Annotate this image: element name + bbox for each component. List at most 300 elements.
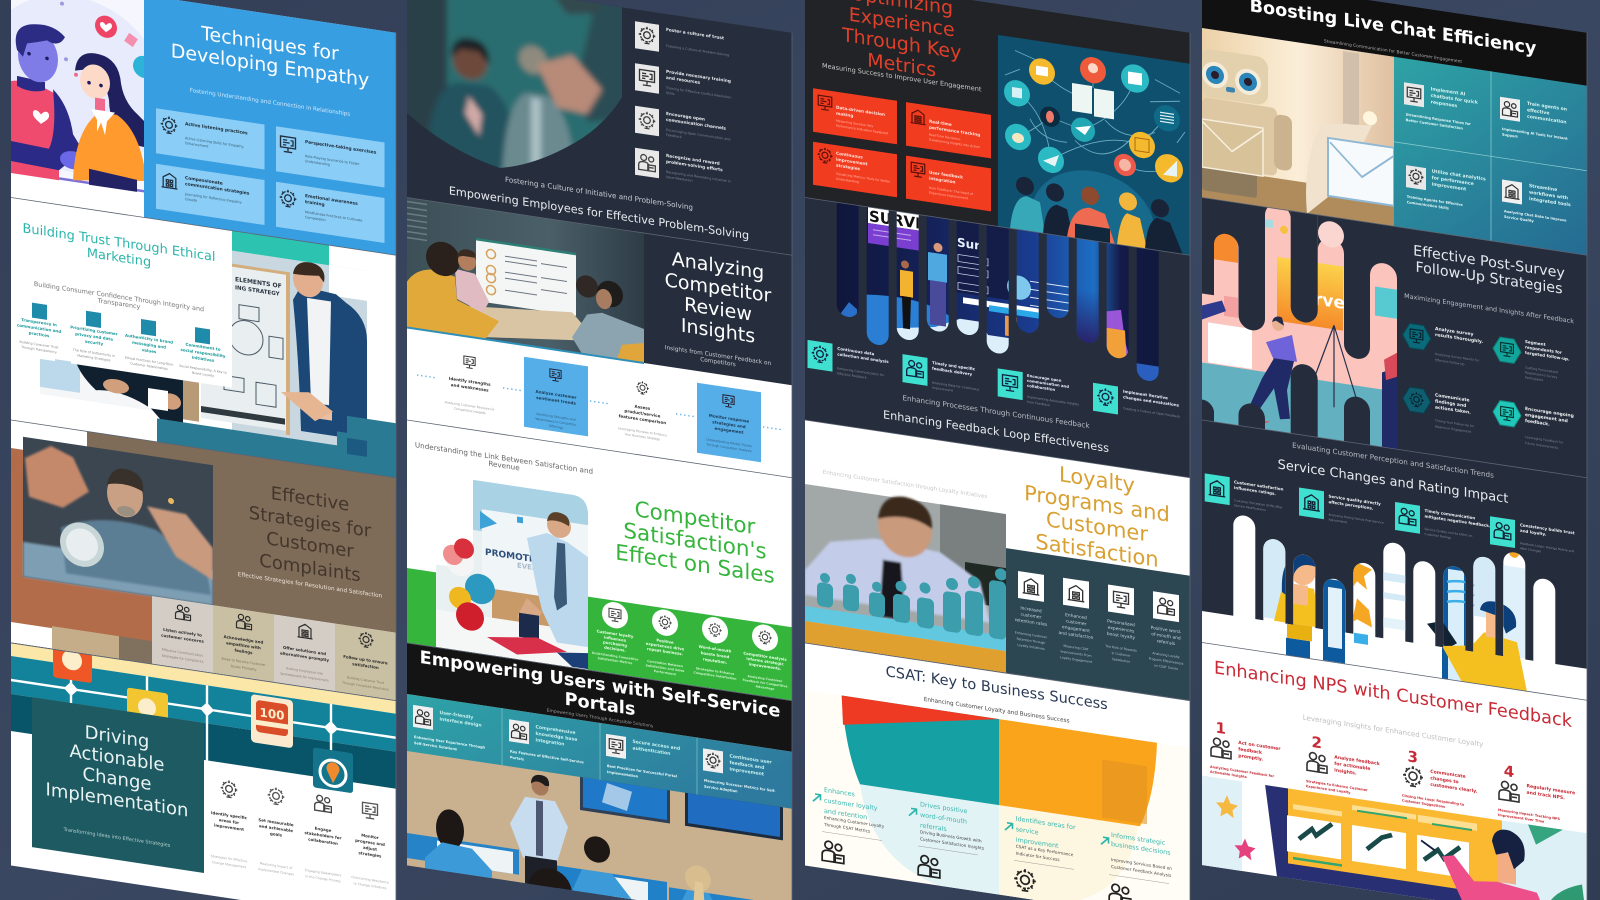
item: positive experiences [646,607,685,678]
card: active listening [156,108,264,170]
item: loyalty: influences [604,635,627,643]
step 3: customers clearly. [1430,782,1478,795]
item: continuous data: Enhancing Communication for [837,366,885,377]
item: workflows: Analyzing Chat Data to Improve [1504,209,1567,223]
item: continuous feedback: Continuous user [730,753,772,766]
decorative quote marks [12,199,76,254]
item: word of mouth: on CSAT Scores [1154,663,1178,671]
item: encourage: Future Improvements [1525,441,1559,450]
card: emotional awareness: Compassion [305,215,326,222]
title: Change [83,764,151,795]
item: workflows: Service Quality [1504,215,1534,223]
subtitle: Measuring Success to Improve User Engagement [822,62,982,94]
card: user feedback: integration [929,176,955,185]
step 3: Customer Suggestions [1402,799,1445,809]
item: referrals [909,799,984,885]
item: personalized: Personalized [1107,618,1135,628]
item: communication: Feedback [666,133,682,139]
item: encourage: engagement and [1525,412,1568,424]
illustration: survey through vertical pill slots [825,200,1170,392]
card: data-driven: making [836,111,853,118]
panel: teal tips [1394,57,1587,256]
item: monitor: Monitor [361,833,379,840]
title: Actionable [70,741,164,776]
item: communication: Customer Ratings [1424,532,1452,540]
item: loyalty: customer loyalty [824,796,878,812]
card: perspective-taking: Understanding [305,159,330,167]
title: Techniques for [200,21,339,65]
item: segment: Crafting Personalized [1525,365,1558,374]
step 2 [1306,732,1381,799]
item: training: Provide necessary training [666,69,731,85]
item: privacy: Marketing Strategies [77,353,111,362]
photo: man with clock [23,437,213,605]
item: privacy: Prioritizing customer [70,324,118,337]
title: Enhancing Feedback Loop Effectiveness [883,407,1109,455]
card: compassionate communication: Compassionate [185,175,223,187]
item: open communication: from Feedback [1027,400,1050,407]
item: training: Skills [666,91,675,96]
item: secure access: Secure access and [632,739,680,752]
item: word of mouth: referrals [1157,638,1176,647]
item: retention: Retention Through [1017,637,1045,645]
slide: CSAT Key to Business Success [805,643,1190,900]
item: retention [1015,570,1048,651]
item: satisfaction: Service Modifications [1234,503,1266,512]
item: positive experiences: Positive [656,637,674,645]
card: emotional awareness [276,182,384,243]
item: communicate [1403,386,1475,434]
item: personalized: boost loyalty [1107,631,1136,641]
item: engagement: engagement [1062,624,1090,634]
slide: Effective Strategies for Customer Complaints [11,420,396,701]
item: timely feedback [902,354,979,397]
slide: Competitor Satisfaction's Effect on Sales [407,420,792,701]
step 3: Closing the Loop: Responding to [1402,794,1465,807]
item: satisfaction [1205,473,1284,515]
item: authenticity: Ethical Practices for Long-Term [125,356,173,367]
item: train agents: Train agents on [1527,101,1567,113]
item: communication [1395,502,1491,546]
item: consistency: Consistency builds trust [1520,522,1575,535]
item: identify: Strategies for Effective [211,854,247,863]
item: timely feedback: Analyzing Data for Continuous [932,381,979,392]
item: consistency [1490,516,1575,558]
photo: promotional display [436,474,588,670]
item: responsibility: initiatives [192,355,215,363]
item: response card: strategies and [712,419,746,429]
item: sentiment card: Weaknesses in Competitor [535,417,577,427]
step 2: Experience and Loyalty [1306,784,1351,795]
item: engagement: and satisfaction [1059,630,1094,641]
item: segment: respondents for [1525,344,1563,355]
item: stakeholders: stakeholders for [305,830,341,841]
item: stakeholders [305,793,342,884]
step 1: promptly. [1238,753,1263,763]
item: secure access [606,734,680,785]
slide: Effective Post-Survey Follow-Up Strategies [1202,192,1587,478]
item: monitor: to Change Initiatives [354,881,387,890]
item: iterative changes: Implement iterative [1123,389,1168,400]
title: Competitor [635,497,755,540]
item: AI chatbots [1404,82,1479,133]
item: analyze survey [1403,321,1483,369]
card: continuous improvement: Visualizing Metrics: Tools for Better [836,172,891,184]
item: responsibility: social responsibility [180,347,226,359]
item: measure: Measuring Impact of [260,861,293,870]
title: Effective [271,483,349,516]
photo: blurred team pointing [407,0,622,168]
item: word of mouth: Program Effectiveness [1149,657,1184,666]
title: Empowering Users with Self-Service [420,647,780,722]
item: training: Training for Effective Conflict Resolution [665,86,731,100]
card: data-driven: Performance Indicators Explained [836,124,888,135]
item: continuous feedback: Service Adoption [704,785,738,794]
slide: Building Trust Through Ethical Marketing [11,198,396,478]
title: Portals [565,689,635,720]
item: communication [635,106,730,140]
step 4 [1498,761,1575,828]
item: service improvement: improvement [1016,836,1059,850]
step 2: insights. [1334,767,1357,777]
slide: Enhancing Feedback Loop Effectiveness [805,198,1190,478]
photo: presenter at whiteboard: ELEMENTS OF [235,276,282,290]
item: monitor: Overcoming Resistance [351,875,389,885]
title: Building Trust Through Ethical [23,221,215,265]
title: Effective Post-Survey [1413,243,1565,282]
item: word of mouth: Positive word- [1151,625,1182,635]
illustration: rating dashboard and presenter [1202,762,1587,900]
item: listen actively: Strategies for Complaints [162,654,204,664]
item: competitor analysis: improvements. [749,661,782,671]
item: consistency: After Changes [1520,546,1542,553]
slide: Driving Actionable Change Implementation [11,635,396,900]
card: perspective-taking: Perspective-taking exercises [305,139,377,156]
title: Experience [849,3,955,41]
item: timely feedback: Improvement [932,386,954,393]
step 4: and track NPS. [1526,790,1565,801]
title: Complaints [259,550,361,586]
item: continuous feedback: improvement [730,766,765,778]
card: compassionate communication [156,164,264,225]
photo: promotional display: PROMOTI [485,548,532,565]
step 1: 1 [1215,719,1226,738]
item: transparency: Building Consumer Trust [20,340,59,350]
item: loyalty: Enhancing Customer Loyalty [824,815,885,829]
item: acknowledge: feelings [235,648,253,655]
item: strengths: Identify strengths [449,376,491,387]
subtitle: Transparency [97,296,140,311]
item: stakeholders: Engage [315,826,332,833]
item: communication: Timely communication [1424,508,1475,521]
item: listen actively [152,596,213,673]
slide: Enhancing NPS with Customer Feedback [1202,642,1587,900]
item: open communication: communication and [1027,378,1069,389]
card: user feedback: User Feedback: The Heart of [929,186,974,196]
subtitle: Leveraging Insights for Enhanced Customer Loyalty [1303,713,1483,749]
item: interface design: User-friendly [440,710,473,721]
illustration: survey through vertical pill slots: Sur [957,235,980,253]
item: engagement: Loyalty Engagement [1060,655,1093,664]
item: response card [697,383,761,462]
item: strengths [445,353,495,417]
item: continuous data: collection and analysis [837,351,889,364]
title: Marketing [87,246,151,270]
item: strategic decisions: Informs strategic [1111,831,1166,847]
item: measure: Set measurable [258,817,294,827]
item: listen actively: Effective Communication [162,648,203,658]
item: referrals: Driving Business Growth with [920,829,982,844]
panel: blue content [144,0,396,255]
item: authenticity: values [142,347,157,354]
item: quality: Service quality directly [1328,493,1381,506]
item: retention: Increased [1020,605,1042,615]
item: competitor analysis: Competitor analysis [743,650,787,662]
item: encourage: Leveraging Feedback for [1525,435,1564,445]
item: foster trust: Foster a culture of trust [666,27,724,42]
subtitle: Fostering Understanding and Connection in Relationships [190,88,350,118]
item: knowledge base: Comprehensive [536,724,575,736]
item: chat analytics: improvement [1432,181,1467,193]
subtitle: Maximizing Engagement and Insights After Feedback [1404,292,1574,325]
title: Effect on Sales [615,540,775,589]
step 2: for actionable [1334,761,1370,772]
card: continuous improvement: improvement [836,157,868,166]
item: authenticity: messaging and [132,340,166,350]
item: interface design: interface design [440,716,482,729]
step 4: Improvement Over Time [1498,813,1545,824]
item: identify: improvement [214,822,244,832]
card: continuous improvement [813,142,897,197]
column 1 of slides [0,0,396,900]
item: knowledge base [509,719,584,771]
item: quality: Analyzing Rating Trends Post-Service [1328,512,1384,525]
title: Review [684,293,752,326]
item: continuous data: Effective Feedback [837,371,867,380]
item: encourage: feedback. [1525,418,1550,428]
photo: man arranging figures [805,482,1007,673]
item: features: features comparison [619,413,666,425]
item: competitor analysis: Advantage [756,684,774,691]
item: follow up: Follow up to ensure [343,654,388,666]
item: chat analytics: Training Agents for Effective [1407,195,1463,207]
item: listen actively: Listen actively to [163,627,202,638]
item: word of mouth: Competitive Satisfaction [693,670,737,681]
item: service improvement: Identifies areas for [1016,815,1076,832]
item: loyalty: Satisfaction Metrics [598,656,633,665]
item: retention: customer [1021,612,1042,621]
slide: Service Changes and Rating Impact [1202,420,1587,702]
item: monitor: progress and [355,838,385,847]
title: Service Changes and Rating Impact [1278,457,1508,507]
item: loyalty: Understanding Competitor [592,651,639,662]
item: offer solutions: alternatives promptly [280,650,329,663]
item: authenticity [125,317,173,372]
card: data-driven: Measuring Success: Key [836,119,873,128]
item: responsibility [179,325,227,380]
step 4: Measuring Impact: Tracking NPS [1498,808,1561,821]
item: strategic decisions: Customer Feedback Analysis [1111,864,1171,878]
item: communicate: Timing Your Follow-Up for [1434,418,1475,428]
slide: Optimizing Experience Through Key Metrics [805,0,1190,290]
step 1: feedback [1238,746,1263,756]
item: retention: Enhancing Customer [1015,630,1048,639]
item: responsibility: Social Responsibility: A Key to [179,364,227,375]
panel: benefits [1006,548,1190,701]
item: satisfaction: influences ratings. [1234,485,1276,496]
card: continuous improvement: strategies [836,163,861,171]
item: positive experiences: experiences drive [646,641,685,652]
illustration: survey through vertical pill slots: SURVE [869,207,925,234]
item: follow up [335,624,396,701]
item: timely feedback: feedback delivery [932,366,973,377]
item: responsibility: Commitment to [186,342,221,352]
card: real-time: Real-Time Decisions: [929,133,961,141]
item: measure: and achievable [259,823,293,833]
map bands with route lines and tiles [11,635,396,800]
subtitle: Building Consumer Confidence Through Integrity and [34,280,204,313]
subtitle: Evaluating Customer Perception and Satisfaction Trends [1292,441,1494,480]
panel: white header and steps [1202,642,1587,833]
item: recognize [635,148,730,182]
card: perspective-taking [276,126,384,188]
item: consistency: and loyalty. [1520,528,1547,537]
step 1 [1210,718,1281,784]
item: acknowledge: Steps to Resolve Customer [221,657,266,667]
item: loyalty [813,784,885,870]
item: identify: Identify specific [211,810,248,820]
item: features: Assess [635,404,651,411]
item: stakeholders: in the Change Process [305,874,341,884]
tile: 100 [251,694,293,748]
slide: Loyalty Programs and Customer Satisfaction [805,420,1190,701]
item: transparency: Through Transparency [20,345,57,354]
item: iterative changes [1093,383,1180,424]
title: CSAT: Key to Business Success [886,663,1108,713]
item: loyalty: Through CSAT Metrics [823,822,870,834]
item: recognize: Issue Resolution [666,175,693,183]
item: identify: areas for [219,817,239,825]
card: user feedback: Experience Improvement [929,191,969,201]
step 2: Analyze feedback [1334,754,1381,767]
step 4: 4 [1504,762,1514,781]
item: positive experiences: Satisfaction and Sales [646,663,685,673]
item: train agents: communication [1527,114,1567,126]
item: transparency: communication and [17,322,61,334]
item: iterative changes: Creating a Culture of Open Feedback [1123,406,1180,419]
item: segment: targeted follow-up. [1525,350,1570,362]
item: train agents [1500,97,1568,146]
photo: presenter at whiteboard [40,231,367,446]
item: knowledge base: Key Features of Effective Self-Service [510,749,584,765]
item: continuous feedback [703,748,776,799]
item: stakeholders: Engaging Stakeholders [305,868,342,878]
item: engagement: Enhanced [1065,612,1087,621]
item: loyalty: Enhances [824,786,856,799]
item: iterative changes: changes and evaluations [1123,394,1180,408]
item: communication: Encourage open [666,111,705,123]
item: recognize: Recognize and reward [666,153,720,167]
item: features: Your Business Strategy [625,432,660,441]
item: secure access: authentication [632,745,670,757]
item: positive experiences: repeat business. [647,646,684,656]
item: features [618,378,667,443]
card: compassionate communication: Journaling for Reflective Empathy [184,192,242,205]
item: workflows: workflows with [1529,190,1568,201]
dotted arrows [417,375,783,430]
item: AI chatbots: responses [1431,99,1457,109]
step 3: Communicate [1430,769,1466,780]
card: active listening: Active Listening Skills for Empathy [185,136,244,149]
step 1: Actionable Insights [1210,770,1247,779]
item: personalized: The Role of Rewards [1104,644,1137,653]
panel: title [32,697,204,873]
item: privacy [70,308,118,364]
item: AI chatbots: Implement AI [1431,86,1466,98]
item: follow up: satisfaction [352,661,379,670]
title: Customer [266,528,354,562]
item: acknowledge: Acknowledge and [224,634,263,645]
card: real-time: Transforming Insights into Action [928,137,980,149]
item: positive experiences: Performance [654,669,676,676]
card: real-time: Real-time [929,119,952,127]
item: interface design: Enhancing User Experience Through [414,735,486,750]
item: privacy: privacy and data [75,331,113,342]
item: engagement: Improvements From [1060,649,1092,658]
item: communication: mitigates negative feedback. [1424,513,1491,528]
title: Developing Empathy [171,39,369,92]
item: chat analytics [1406,165,1486,216]
illustration: customers rating through arches [1202,500,1587,702]
item: sentiment card: Identifying Strengths and [536,412,576,422]
item: offer solutions [274,614,335,692]
item: analyze survey: results thoroughly. [1435,332,1483,345]
card: emotional awareness: Mindfulness Practices to Cultivate [305,210,362,223]
decorative teal blocks [157,416,396,478]
item: chat analytics: Communication Skills [1407,200,1449,211]
item: competitor analysis: Feedback for Competitive [743,678,787,689]
item: analyze survey: Analyze survey [1435,326,1473,338]
item: word of mouth: reputation. [703,656,728,665]
item: engagement: Measuring CSAT [1063,644,1089,652]
slide: Empowering Users with Self-Service Portals [407,643,792,900]
step 3: 3 [1407,747,1418,767]
photo: presenter at whiteboard: ING STRATEGY [235,285,281,298]
slide: Boosting Live Chat Efficiency [1199,0,1587,256]
slide: Analyzing Competitor Review Insights [407,198,792,478]
title: Through Key [841,23,961,64]
item: recognize: problem-solving efforts [666,159,723,173]
title: Implementation [46,779,188,822]
photo: call centre [407,749,792,900]
subtitle: Empowering Users Through Accessible Solutions [547,707,654,730]
title: Customer [1046,506,1148,546]
item: acknowledge: empathize with [226,640,261,650]
step 4: Regularly measure [1526,783,1575,796]
card: emotional awareness: Emotional awareness [305,193,358,207]
mask: dark pill shapes [1202,192,1397,450]
header [407,643,792,752]
item: monitor [351,801,389,891]
item: knowledge base: integration [536,737,564,748]
item: loyalty: Customer loyalty [597,628,634,639]
item: loyalty: and retention [824,807,867,821]
item: retention: Loyalty Initiatives [1017,643,1045,651]
step 1: Analyzing Customer Feedback for [1210,765,1275,778]
subtitle: Fostering a Culture of Initiative and Problem-Solving [505,175,693,212]
item: communicate: findings and [1435,398,1466,409]
item: identify: Change Management [212,860,247,869]
